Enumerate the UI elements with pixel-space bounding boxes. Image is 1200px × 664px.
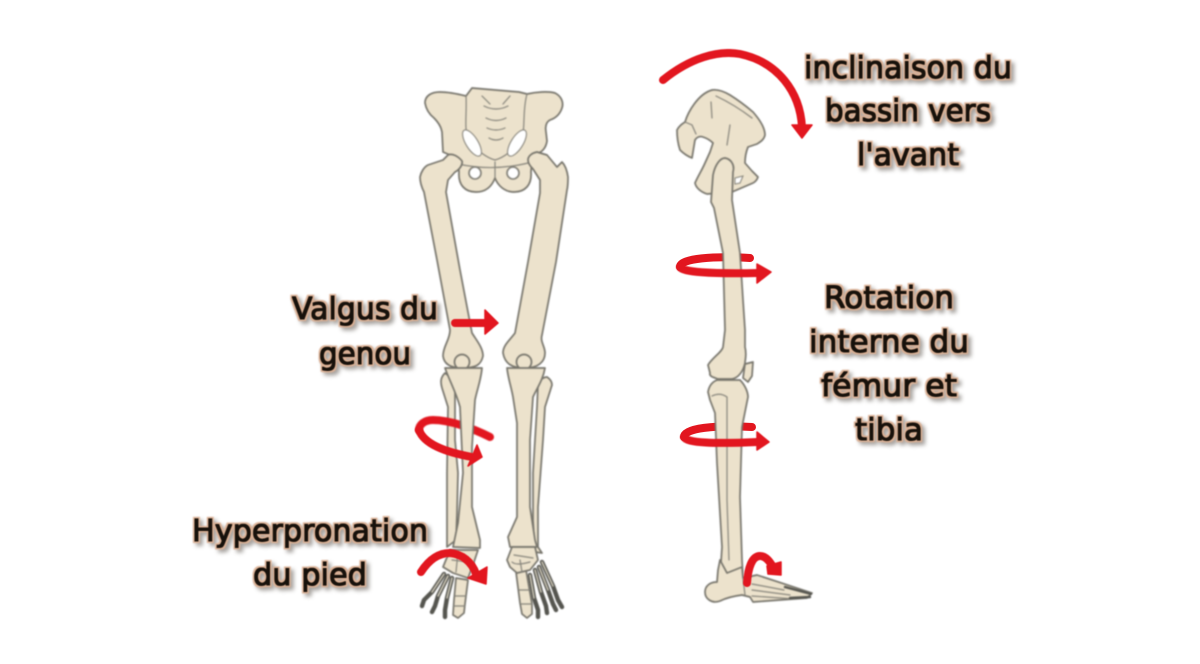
foot rotation arrow side view	[747, 556, 781, 583]
left foot	[422, 550, 478, 618]
left fibula	[441, 373, 458, 547]
label: Valgus du genou: Valgus du	[292, 292, 438, 327]
tibia and fibula side view	[708, 380, 748, 577]
pelvis tilt arrow	[663, 53, 812, 138]
pelvis front view	[425, 88, 563, 192]
side view skeleton (back part of the arrows included below the bones)	[663, 53, 812, 602]
label: Hyperpronation du pied: du pied	[253, 558, 367, 593]
label: Rotation interne du fémur et tibia: fémur et	[821, 369, 957, 404]
label: Valgus du genou: genou	[319, 337, 411, 372]
label: inclinaison du bassin vers l'avant: l'avant	[857, 138, 959, 173]
right fibula	[533, 377, 552, 553]
hip openings	[459, 127, 485, 159]
hip notch	[735, 176, 743, 184]
left tibia	[445, 368, 482, 548]
label: inclinaison du bassin vers l'avant: bassin vers	[825, 94, 991, 129]
tibia rotation arrow back line	[684, 426, 752, 437]
left femur	[420, 154, 483, 368]
side bones	[677, 90, 812, 602]
label: Valgus du genou	[292, 292, 438, 372]
label: Rotation interne du fémur et tibia: Rotation	[824, 281, 954, 316]
femur rotation arrow front	[680, 264, 771, 283]
label: Hyperpronation du pied: Hyperpronation	[192, 514, 428, 549]
right tibia	[507, 368, 545, 547]
right foot	[507, 547, 562, 618]
right femur	[503, 152, 568, 368]
femur side view	[708, 158, 746, 379]
label: Rotation interne du fémur et tibia: interne du	[809, 325, 969, 360]
label: inclinaison du bassin vers l'avant: inclinaison du	[804, 51, 1012, 86]
patella side view	[743, 362, 753, 382]
back of tibia rotation arrow	[419, 420, 490, 437]
valgus arrow	[455, 310, 498, 334]
right patella	[516, 354, 532, 370]
label: Rotation interne du fémur et tibia	[809, 281, 969, 448]
foot side view	[705, 560, 812, 602]
front view skeleton	[419, 88, 568, 618]
label: Rotation interne du fémur et tibia: tibia	[855, 413, 923, 448]
pelvis side view	[677, 90, 765, 194]
foot rotation arrow front view	[421, 553, 487, 584]
label: inclinaison du bassin vers l'avant	[804, 51, 1012, 173]
label: Hyperpronation du pied	[192, 514, 428, 593]
left patella	[454, 354, 470, 370]
femur rotation arrow back line	[680, 257, 750, 267]
tibia rotation arrow front	[684, 432, 769, 450]
tibia rotation arrow front part	[419, 430, 482, 466]
